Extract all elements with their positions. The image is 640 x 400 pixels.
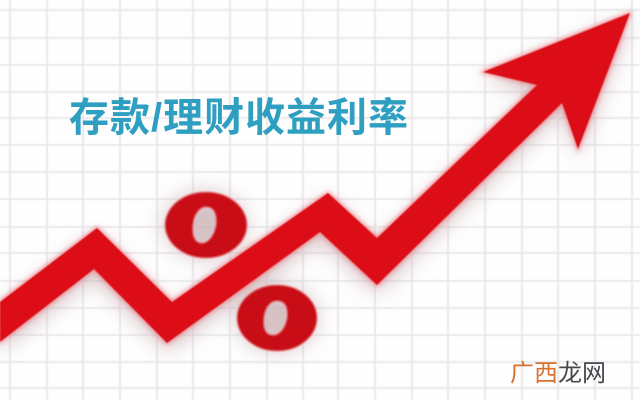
title: 存款/理财收益利率 — [69, 96, 408, 140]
watermark: 广西龙网 — [510, 360, 606, 387]
percent bottom circle — [237, 285, 317, 351]
percent top circle — [165, 192, 247, 258]
percent sign — [165, 192, 317, 351]
